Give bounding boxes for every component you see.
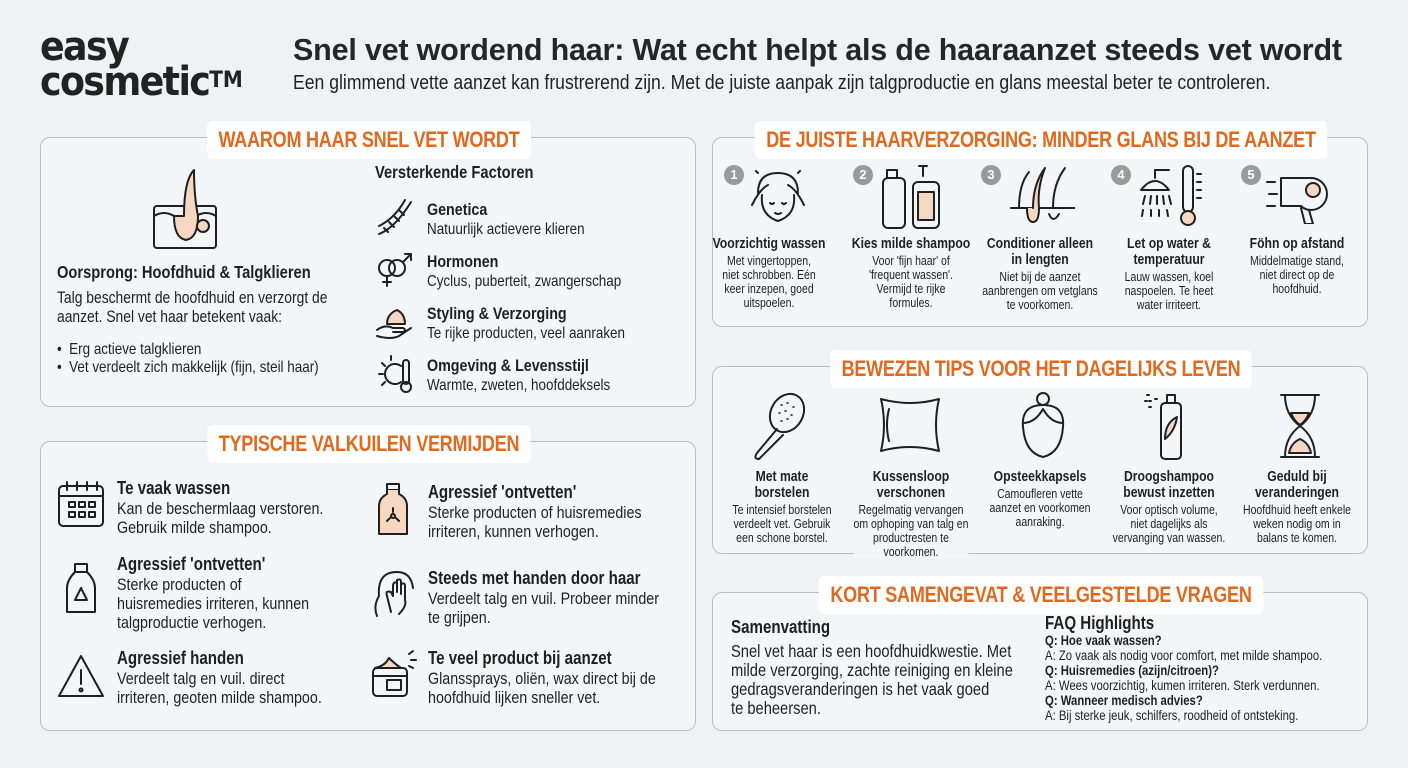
step 4 bbox=[1111, 165, 1131, 185]
tip 2 text: Regelmatig vervangen bbox=[858, 503, 964, 517]
icon: hair follicle bbox=[153, 169, 217, 249]
step 5 text: Middelmatige stand, bbox=[1250, 254, 1344, 268]
item: agressief ontvetten left: Sterke producten of bbox=[117, 575, 242, 594]
step 2 text: 'frequent wassen'. bbox=[869, 268, 953, 282]
step 2 bbox=[853, 165, 873, 185]
tip 5 text: balans te komen. bbox=[1257, 531, 1337, 545]
faq: A: Bij sterke jeuk, schilfers, roodheid of ontsteking. bbox=[1045, 708, 1298, 723]
factors list: Versterkende Factoren bbox=[375, 162, 534, 182]
tip 5 text: Geduld bij bbox=[1267, 469, 1327, 485]
text: oorsprong: Oorsprong: Hoofdhuid & Talgklieren bbox=[57, 262, 311, 282]
item: agressief ontvetten left: talgproductie verhogen. bbox=[117, 613, 266, 632]
item: te veel product bbox=[372, 648, 656, 707]
summary: milde verzorging, zachte reiniging en kleine bbox=[731, 660, 1013, 680]
step 1: 1 bbox=[730, 167, 738, 182]
item: agressief ontvetten right: irriteren, kunnen verhogen. bbox=[428, 522, 599, 541]
step 2: 2 bbox=[859, 167, 867, 182]
step 4 text: naspoelen. Te heet bbox=[1125, 284, 1213, 298]
step 1 text: niet schrobben. Eén bbox=[722, 268, 816, 282]
icon: updo head bbox=[1022, 392, 1064, 458]
tip 3 text bbox=[990, 469, 1090, 529]
icon: hair strands bbox=[1010, 167, 1075, 223]
step 4: 4 bbox=[1117, 167, 1125, 182]
heading bbox=[207, 425, 531, 463]
item: agressief handen: Agressief handen bbox=[117, 648, 244, 668]
factor: hormonen: Hormonen bbox=[427, 252, 498, 271]
step 1 text bbox=[712, 236, 825, 310]
step 1 text: keer inzepen, goed bbox=[724, 282, 814, 296]
heading bbox=[830, 350, 1252, 388]
heading: TYPISCHE VALKUILEN VERMIJDEN bbox=[219, 431, 519, 456]
icon: brush bbox=[754, 392, 806, 460]
heading: WAAROM HAAR SNEL VET WORDT bbox=[219, 127, 519, 152]
tip 2 text: om ophoping van talg en bbox=[853, 517, 969, 531]
heading bbox=[207, 121, 531, 159]
step 3 text: Conditioner alleen bbox=[987, 236, 1093, 252]
factor: omgeving: Omgeving & Levensstijl bbox=[427, 356, 589, 375]
factor: omgeving: Warmte, zweten, hoofddeksels bbox=[427, 377, 610, 394]
panel: waarom haar snel vet wordt bbox=[40, 137, 696, 407]
factor: hormonen: Cyclus, puberteit, zwangerschap bbox=[427, 273, 621, 290]
item: handen door haar: Steeds met handen door haar bbox=[428, 568, 641, 588]
tip 4 text bbox=[1112, 469, 1225, 545]
logo: easy bbox=[40, 24, 128, 70]
step 5 bbox=[1241, 165, 1261, 185]
item: handen door haar: te grijpen. bbox=[428, 608, 491, 627]
tip 1 text: Met mate bbox=[756, 469, 808, 485]
tip 5 text: veranderingen bbox=[1255, 485, 1339, 501]
item: agressief ontvetten right bbox=[378, 482, 642, 541]
text: oorsprong bbox=[57, 262, 327, 376]
icon: washing head bbox=[751, 170, 805, 222]
step 3 bbox=[981, 165, 1001, 185]
panel: kort samengevat & faq bbox=[712, 592, 1368, 731]
step 5 text: hoofdhuid. bbox=[1272, 282, 1322, 296]
tip 5 text bbox=[1243, 469, 1351, 545]
summary: te beheersen. bbox=[731, 698, 821, 718]
item: te vaak wassen: Gebruik milde shampoo. bbox=[117, 518, 272, 537]
panel: bewezen tips bbox=[712, 366, 1368, 554]
item: agressief ontvetten right: Agressief 'ontvetten' bbox=[428, 482, 576, 502]
step 4 text bbox=[1125, 236, 1214, 312]
step 3 text bbox=[982, 236, 1098, 312]
step 2 text: formules. bbox=[889, 296, 933, 310]
step 2 text: Voor 'fijn haar' of bbox=[872, 254, 950, 268]
tip 3 text: Camoufleren vette bbox=[997, 487, 1083, 501]
item: agressief ontvetten left: Agressief 'ontvetten' bbox=[117, 554, 265, 574]
icon: shower thermometer bbox=[1140, 165, 1202, 226]
step 2 text bbox=[852, 236, 970, 310]
factors list bbox=[375, 162, 625, 394]
icon: dry shampoo spray bbox=[1144, 394, 1182, 460]
step 1 text: uitspoelen. bbox=[744, 296, 794, 310]
step 4 text: Let op water & bbox=[1127, 236, 1211, 252]
item: te veel product: Te veel product bij aanzet bbox=[428, 648, 612, 668]
item: agressief handen bbox=[58, 648, 322, 707]
tip 1 text: verdeelt vet. Gebruik bbox=[734, 517, 830, 531]
tip 5 text: Hoofdhuid heeft enkele bbox=[1243, 503, 1351, 517]
heading: BEWEZEN TIPS VOOR HET DAGELIJKS LEVEN bbox=[842, 356, 1240, 381]
text: oorsprong: • Vet verdeelt zich makkelijk (fijn, steil haar) bbox=[57, 359, 319, 376]
heading: KORT SAMENGEVAT & VEELGESTELDE VRAGEN bbox=[830, 582, 1252, 607]
factor: styling: Styling & Verzorging bbox=[427, 304, 567, 323]
step 1 text: Met vingertoppen, bbox=[727, 254, 811, 268]
step 2 text: Vermijd te rijke bbox=[877, 282, 945, 296]
tip 2 text: Kussensloop bbox=[873, 469, 949, 485]
item: te veel product: Glanssprays, oliën, wax direct bij de bbox=[428, 669, 656, 688]
step 2 text: Kies milde shampoo bbox=[852, 236, 970, 252]
tip 2 text: productresten te bbox=[873, 531, 949, 545]
faq: Q: Hoe vaak wassen? bbox=[1045, 633, 1162, 648]
faq: Q: Huisremedies (azijn/citroen)? bbox=[1045, 663, 1219, 678]
icon: pillow bbox=[880, 398, 940, 452]
step 4 text: temperatuur bbox=[1133, 252, 1205, 268]
factor: styling bbox=[376, 304, 625, 342]
icon: bottles bbox=[882, 165, 940, 229]
factor: hormonen bbox=[378, 252, 621, 290]
tip 1 text bbox=[732, 469, 832, 545]
step 3 text: te voorkomen. bbox=[1007, 298, 1073, 312]
tip 4 text: Voor optisch volume, bbox=[1120, 503, 1218, 517]
text: oorsprong: Talg beschermt de hoofdhuid en verzorgt de bbox=[57, 289, 327, 307]
heading bbox=[819, 576, 1263, 614]
item: agressief ontvetten left: huisremedies irriteren, kunnen bbox=[117, 594, 309, 613]
tip 4 text: niet dagelijks als bbox=[1130, 517, 1208, 531]
summary: Snel vet haar is een hoofdhuidkwestie. Met bbox=[731, 641, 1011, 661]
summary: gedragsveranderingen is het vaak goed bbox=[731, 679, 989, 699]
title: Snel vet wordend haar: Wat echt helpt als de haaraanzet steeds vet wordt bbox=[293, 33, 1342, 67]
tip 2 text: verschonen bbox=[877, 485, 945, 501]
tip 4 text: vervanging van wassen. bbox=[1113, 531, 1225, 545]
tip 1 text: Te intensief borstelen bbox=[732, 503, 832, 517]
item: agressief handen: irriteren, geoten milde shampoo. bbox=[117, 688, 322, 707]
faq: FAQ Highlights bbox=[1045, 613, 1154, 633]
tip 4 text: Droogshampoo bbox=[1124, 469, 1214, 485]
step 5 text: Föhn op afstand bbox=[1250, 236, 1344, 252]
tip 2 text: voorkomen. bbox=[884, 545, 938, 559]
item: handen door haar bbox=[374, 568, 659, 627]
step 4 text: Lauw wassen, koel bbox=[1125, 270, 1213, 284]
tip 5 text: weken nodig om in bbox=[1253, 517, 1341, 531]
tip 2 text bbox=[853, 469, 969, 559]
item: agressief ontvetten left bbox=[66, 554, 309, 632]
item: agressief handen: Verdeelt talg en vuil. direct bbox=[117, 669, 285, 688]
summary bbox=[731, 617, 1013, 718]
step 5: 5 bbox=[1247, 167, 1255, 182]
tip 3 text: aanzet en voorkomen bbox=[990, 501, 1090, 515]
logo: cosmeticTM bbox=[40, 59, 243, 105]
step 3 text: aanbrengen om vetglans bbox=[982, 284, 1098, 298]
text: oorsprong: aanzet. Snel vet haar betekent vaak: bbox=[57, 308, 282, 326]
logo bbox=[40, 24, 243, 105]
summary: Samenvatting bbox=[731, 617, 830, 637]
faq: A: Zo vaak als nodig voor comfort, met milde shampoo. bbox=[1045, 648, 1322, 663]
item: te vaak wassen: Kan de beschermlaag verstoren. bbox=[117, 499, 323, 518]
step 1 text: Voorzichtig wassen bbox=[713, 236, 825, 252]
item: handen door haar: Verdeelt talg en vuil. Probeer minder bbox=[428, 589, 659, 608]
tip 3 text: aanraking. bbox=[1015, 515, 1065, 529]
item: agressief ontvetten right: Sterke producten of huisremedies bbox=[428, 503, 642, 522]
icon: hair dryer bbox=[1266, 177, 1328, 224]
factor: omgeving bbox=[378, 355, 610, 394]
panel: de juiste haarverzorging bbox=[712, 137, 1368, 327]
step 4 text: water irriteert. bbox=[1137, 298, 1201, 312]
icon: hourglass bbox=[1280, 394, 1320, 458]
factor: genetica: Natuurlijk actievere klieren bbox=[427, 221, 585, 238]
heading: DE JUISTE HAARVERZORGING: MINDER GLANS BIJ DE AANZET bbox=[766, 127, 1316, 152]
heading bbox=[755, 121, 1327, 159]
factor: genetica bbox=[378, 199, 585, 238]
item: te vaak wassen: Te vaak wassen bbox=[117, 478, 230, 498]
text: oorsprong: • Erg actieve talgklieren bbox=[57, 341, 201, 358]
factor: genetica: Genetica bbox=[427, 200, 487, 219]
tip 1 text: een schone borstel. bbox=[736, 531, 828, 545]
subtitle: Een glimmend vette aanzet kan frustrerend zijn. Met de juiste aanpak zijn talgproductie en glans meestal beter te controleren. bbox=[293, 72, 1270, 94]
tip 3 text: Opsteekkapsels bbox=[994, 469, 1086, 485]
step 3: 3 bbox=[987, 167, 995, 182]
faq: A: Wees voorzichtig, kumen irriteren. Sterk verdunnen. bbox=[1045, 678, 1320, 693]
item: te vaak wassen bbox=[58, 478, 323, 537]
faq bbox=[1045, 613, 1322, 723]
step 5 text bbox=[1250, 236, 1344, 296]
factor: styling: Te rijke producten, veel aanraken bbox=[427, 325, 625, 342]
panel: typische valkuilen vermijden bbox=[40, 441, 696, 731]
step 3 text: Niet bij de aanzet bbox=[999, 270, 1081, 284]
step 3 text: in lengten bbox=[1011, 252, 1069, 268]
tip 4 text: bewust inzetten bbox=[1123, 485, 1215, 501]
faq: Q: Wanneer medisch advies? bbox=[1045, 693, 1203, 708]
item: te veel product: hoofdhuid lijken sneller vet. bbox=[428, 688, 600, 707]
tip 1 text: borstelen bbox=[755, 485, 809, 501]
step 5 text: niet direct op de bbox=[1260, 268, 1334, 282]
step 1 bbox=[724, 165, 744, 185]
